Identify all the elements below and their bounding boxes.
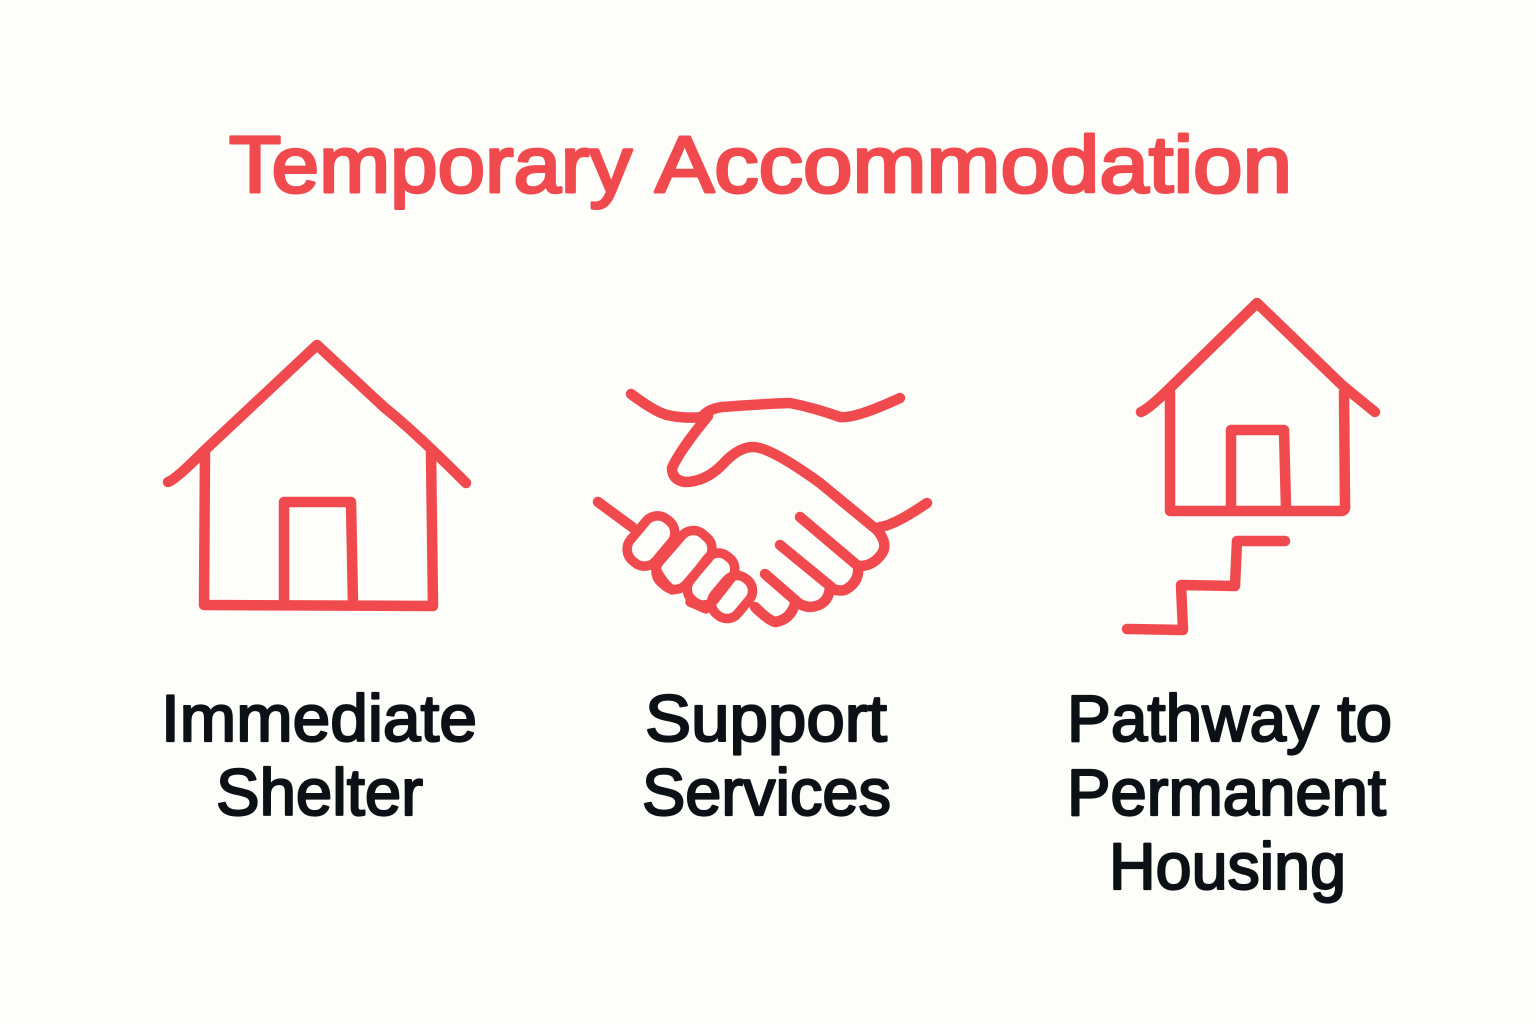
label: pathway to permanent housing: Housing (1109, 829, 1346, 903)
title: Accommodation (655, 120, 1292, 209)
label: support services (642, 681, 891, 829)
panel: support services (598, 394, 927, 829)
title (229, 120, 1292, 209)
icon: handshake (598, 394, 927, 624)
label: immediate shelter (161, 681, 477, 829)
label: pathway to permanent housing: Pathway to (1067, 681, 1392, 755)
label: support services: Services (642, 755, 891, 829)
label: support services: Support (645, 681, 887, 755)
label: pathway to permanent housing: Permanent (1067, 755, 1386, 829)
label: immediate shelter: Shelter (216, 755, 423, 829)
icon: clasped fingers (621, 510, 758, 624)
title: Temporary (229, 120, 632, 209)
icon: house with steps (1127, 303, 1375, 630)
panel: pathway to permanent housing (1067, 303, 1392, 903)
label: pathway to permanent housing (1067, 681, 1392, 903)
label: immediate shelter: Immediate (161, 681, 477, 755)
icon: house (168, 345, 466, 606)
panel: immediate shelter (161, 345, 477, 829)
